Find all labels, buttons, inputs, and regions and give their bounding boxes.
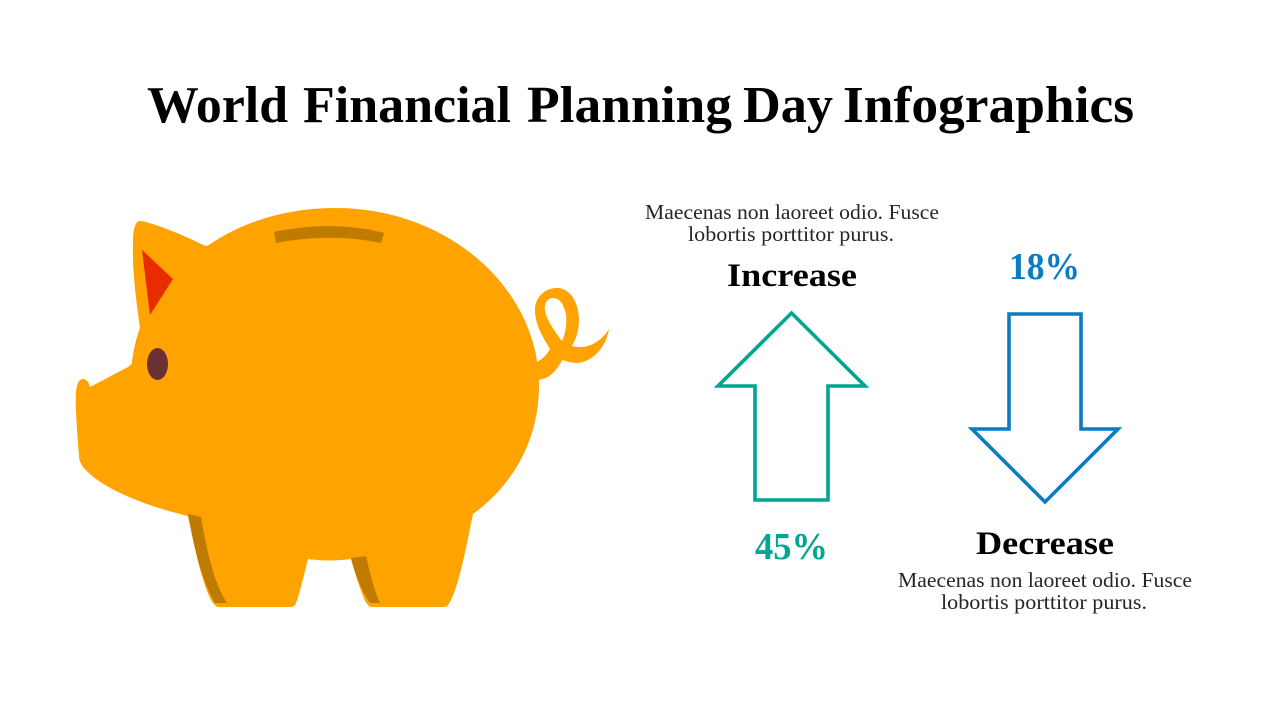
icon: up arrow — [718, 313, 865, 500]
left leg shadow — [188, 514, 227, 603]
increase heading: Increase — [727, 258, 857, 294]
coin slot — [274, 226, 384, 243]
title: Planning — [527, 77, 732, 134]
increase description: lobortis porttitor purus. — [688, 222, 894, 246]
title: Day — [743, 77, 833, 134]
title: World — [147, 77, 288, 134]
increase description: Maecenas non laoreet odio. Fusce — [645, 200, 939, 224]
increase percentage: 45% — [755, 526, 828, 568]
decrease percentage: 18% — [1009, 246, 1080, 288]
icon: down arrow — [972, 314, 1118, 502]
eye — [147, 348, 168, 380]
pig tail — [535, 288, 609, 380]
ear inner — [142, 250, 173, 315]
decrease heading: Decrease — [976, 526, 1114, 562]
icon: piggy bank — [76, 208, 609, 607]
decrease description: Maecenas non laoreet odio. Fusce — [898, 568, 1192, 592]
pig body — [76, 208, 539, 607]
right leg shadow — [351, 556, 380, 603]
title: Infographics — [843, 77, 1134, 134]
decrease description: lobortis porttitor purus. — [941, 590, 1147, 614]
title: Financial — [303, 77, 511, 134]
